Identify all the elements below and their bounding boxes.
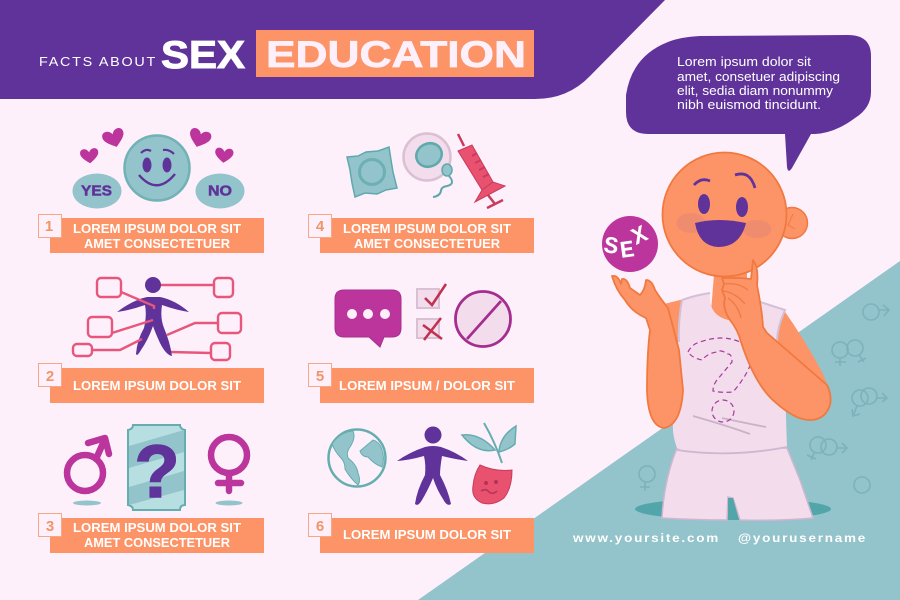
item 3: label: LOREM IPSUM DOLOR SIT [73,521,241,535]
item 2: body diagram icon [73,277,241,360]
right arm and hand [722,260,831,420]
right upper arm [767,309,828,386]
ear [776,208,808,238]
head [662,152,786,276]
item 3: gender and question icon [67,425,247,513]
title: FACTS ABOUT [39,55,157,69]
item 3: label [38,514,264,553]
shadows [73,500,242,506]
title: SEX [161,34,245,77]
syringe [458,134,505,208]
item 6: world, person, plant icon [328,423,516,505]
smiley [124,136,190,200]
male symbol [67,438,109,491]
username text: @yourusername [738,533,867,545]
item 4: label: 4 [316,218,325,235]
label boxes [73,278,241,360]
speech bubble: nibh euismod tincidunt. [677,98,821,112]
eyebrows [694,174,755,188]
mouth [695,220,746,247]
character [602,152,831,520]
item 4: label: LOREM IPSUM DOLOR SIT [343,222,511,236]
item 6: label: LOREM IPSUM DOLOR SIT [343,528,511,542]
cheeks [676,213,772,238]
speech bubble: Lorem ipsum dolor sit [677,55,812,69]
pink line overlays [92,292,154,350]
neck [711,262,747,322]
item 5: label: LOREM IPSUM / DOLOR SIT [339,379,515,393]
item 4: label [308,214,534,253]
checked box [417,284,446,308]
item 1: mood icon [72,127,244,208]
condom wrapper [347,147,397,197]
item 6: label: 6 [316,518,324,535]
shirt [673,293,787,455]
website text: www.yoursite.com [572,533,720,545]
title: EDUCATION [266,34,526,75]
globe [328,430,386,486]
female symbol [211,437,247,491]
no bubble: NO [208,182,232,200]
question card: ? [134,430,180,513]
connector lines [155,285,233,353]
yes bubble: YES [81,182,112,200]
hole in ground [635,498,831,520]
person figure [117,277,189,356]
item 3: label: 3 [46,518,54,535]
header banner [0,0,665,99]
finger details [722,284,748,318]
item 3: label: AMET CONSECTETUER [84,536,230,550]
eyes [698,194,748,217]
yes bubble [72,174,122,208]
item 4: label: AMET CONSECTETUER [354,237,500,251]
shorts [662,448,813,520]
sperm [433,164,452,197]
egg cell [404,134,450,180]
background gender symbols [639,304,889,493]
speech bubble: amet, consetuer adipiscing [677,70,840,84]
teal diagonal background panel [418,261,900,600]
item 5: label: 5 [316,368,324,385]
item 1: label: LOREM IPSUM DOLOR SIT [73,222,241,236]
item 1: label: AMET CONSECTETUER [84,237,230,251]
title [39,30,534,77]
item 2: label [38,364,264,403]
item 5: discussion and choice icon [335,284,510,347]
person figure [397,426,468,505]
leaves [462,423,516,463]
hearts [80,127,234,164]
speech bubble: elit, sedia diam nonummy [677,84,834,98]
speech bubble [626,35,871,171]
sex ball: SEX [602,221,653,266]
title highlight box [256,30,534,77]
item 6: label [308,514,534,553]
crotch gap [728,498,739,520]
chat bubble [335,290,401,347]
mask [473,465,512,504]
left arm and hand [612,276,683,428]
crossed box [417,318,442,340]
prohibition sign [456,292,510,346]
item 2: label: 2 [46,368,54,385]
left upper arm [664,299,684,350]
item 4: contraception icon [347,134,505,208]
dashed question mark [688,338,752,422]
item 5: label [308,364,534,403]
item 1: label: 1 [45,218,53,235]
item 1: label [38,214,264,253]
no bubble [196,174,244,208]
item 2: label: LOREM IPSUM DOLOR SIT [73,379,241,393]
